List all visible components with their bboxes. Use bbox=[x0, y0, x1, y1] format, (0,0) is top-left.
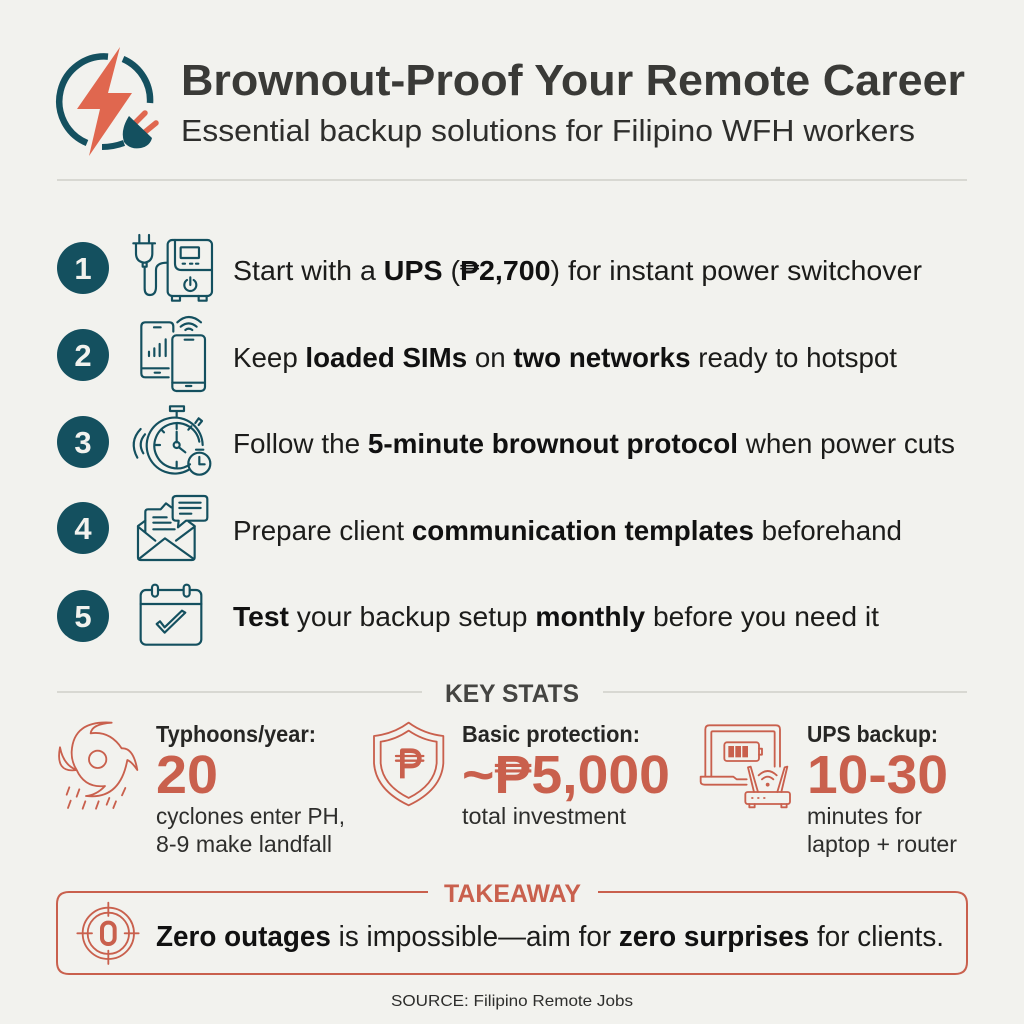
step 3 number badge bbox=[57, 416, 109, 468]
stat: typhoons per year: 20 bbox=[156, 745, 218, 805]
icon: UPS with plug bbox=[133, 235, 212, 301]
takeaway text: Zero outages is impossible—aim for zero surprises for clients. bbox=[156, 921, 944, 953]
stat: UPS backup: 10-30 bbox=[807, 745, 948, 805]
icon: stopwatch bbox=[134, 406, 210, 475]
step 1 number badge bbox=[57, 242, 109, 294]
icon: two phones with signal bbox=[141, 317, 205, 391]
step 4 number badge: 4 bbox=[74, 511, 92, 546]
stat: UPS backup: laptop + router bbox=[807, 831, 957, 857]
step 2 number badge bbox=[57, 329, 109, 381]
icon: zero target bbox=[77, 903, 139, 964]
step 5 number badge bbox=[57, 590, 109, 642]
step 1 text: Start with a UPS (₱2,700) for instant power switchover bbox=[233, 255, 922, 286]
icon: lightning bolt and plug logo bbox=[59, 47, 156, 156]
stat: basic protection: ~₱5,000 bbox=[462, 745, 670, 805]
icon: calendar with check bbox=[141, 585, 201, 645]
stat: UPS backup: UPS backup: bbox=[807, 721, 938, 747]
stat: typhoons per year: Typhoons/year: bbox=[156, 721, 316, 747]
subtitle: Essential backup solutions for Filipino WFH workers bbox=[181, 113, 915, 148]
stat: basic protection: total investment bbox=[462, 803, 627, 829]
stat: basic protection bbox=[462, 721, 670, 829]
icon: typhoon bbox=[59, 722, 137, 809]
step 5 text: Test your backup setup monthly before you need it bbox=[233, 601, 879, 632]
step 5 number badge: 5 bbox=[74, 599, 92, 634]
step 2 number badge: 2 bbox=[74, 338, 92, 373]
step 2 text: Keep loaded SIMs on two networks ready to hotspot bbox=[233, 342, 897, 373]
stat: basic protection: Basic protection: bbox=[462, 721, 640, 747]
stat: UPS backup bbox=[807, 721, 957, 857]
step 1 number badge: 1 bbox=[74, 251, 92, 286]
icon: laptop and router bbox=[701, 725, 790, 807]
step 4 number badge bbox=[57, 502, 109, 554]
stat: UPS backup: minutes for bbox=[807, 803, 922, 829]
step 4 text: Prepare client communication templates beforehand bbox=[233, 515, 902, 546]
source: SOURCE: Filipino Remote Jobs bbox=[391, 993, 633, 1010]
step 3 number badge: 3 bbox=[74, 425, 92, 460]
panel: takeaway bbox=[57, 880, 967, 974]
title: Brownout-Proof Your Remote Career bbox=[181, 56, 965, 105]
heading: takeaway: TAKEAWAY bbox=[444, 880, 581, 908]
heading: key stats: KEY STATS bbox=[445, 680, 579, 708]
icon: peso shield bbox=[374, 723, 443, 805]
stat: typhoons per year: 8-9 make landfall bbox=[156, 831, 332, 857]
stat: typhoons per year bbox=[156, 721, 345, 857]
step 3 text: Follow the 5-minute brownout protocol when power cuts bbox=[233, 428, 955, 459]
icon: envelope and chat bubble bbox=[138, 496, 207, 560]
stat: typhoons per year: cyclones enter PH, bbox=[156, 803, 345, 829]
